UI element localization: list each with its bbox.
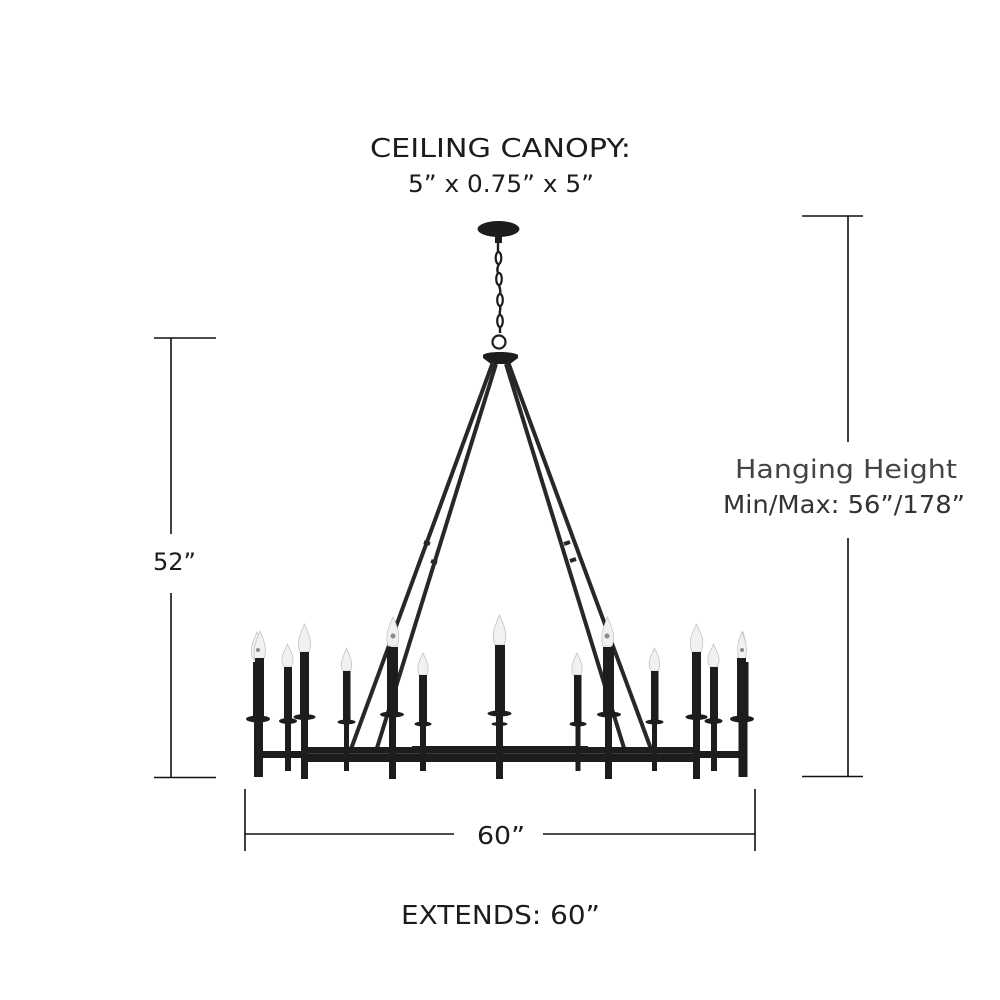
top hub	[483, 352, 518, 364]
candle arm 11	[686, 624, 708, 779]
candle arm 10	[646, 648, 664, 771]
heading: ceiling canopy dimensions: 5” x 0.75” x 5”	[408, 170, 594, 198]
candle arm 4	[338, 648, 356, 771]
caption: extends 60 inches: EXTENDS: 60”	[401, 901, 600, 931]
candle arm centre	[488, 615, 512, 779]
dimension: hanging height	[723, 216, 965, 776]
candle arm far left	[246, 631, 270, 777]
candle arm 12	[704, 644, 722, 771]
chandelier illustration	[246, 221, 754, 779]
hanging chain	[492, 243, 506, 348]
candle arm 5	[380, 617, 404, 779]
dimension: hanging height: Min/Max: 56”/178”	[723, 490, 965, 519]
candle arm 2	[279, 644, 297, 771]
dimension: width 60 inches	[245, 789, 755, 851]
support struts	[351, 362, 651, 749]
candle arm 8	[570, 653, 586, 771]
candle arm far right	[730, 632, 754, 777]
heading: ceiling canopy dimensions	[370, 134, 631, 198]
dimension: overall height 52 inches: 52”	[153, 548, 196, 576]
candle arm 6	[414, 653, 432, 771]
ring frame	[258, 746, 741, 762]
ceiling canopy plate	[478, 221, 520, 243]
candle arm 9	[597, 617, 621, 779]
dimension: hanging height: Hanging Height	[735, 455, 957, 485]
dimension: width 60 inches: 60”	[477, 821, 525, 850]
dimension: overall height 52 inches	[153, 338, 216, 778]
candle arm 3	[294, 624, 316, 779]
heading: ceiling canopy dimensions: CEILING CANOPY:	[370, 134, 631, 164]
